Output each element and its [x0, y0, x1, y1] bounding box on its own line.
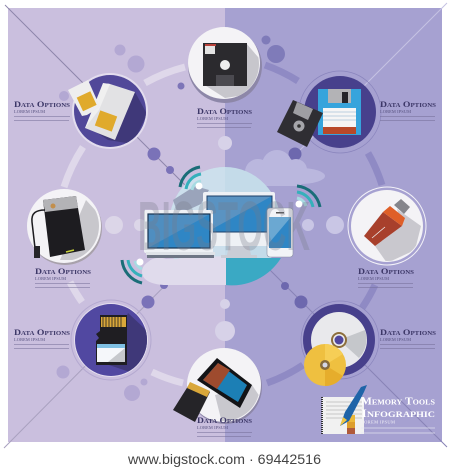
notebook and pen icon — [322, 385, 367, 434]
label: memory card: LOREM IPSUM — [14, 337, 45, 342]
label: USB — [358, 266, 415, 288]
label: hard drive — [35, 266, 92, 288]
label: black diskette: Data Options — [197, 106, 253, 116]
label: tablet: LOREM IPSUM — [197, 425, 228, 430]
label: hard drive: Data Options — [35, 266, 92, 276]
label: blue diskette: LOREM IPSUM — [380, 109, 411, 114]
label: black diskette — [197, 106, 253, 128]
ring arcs — [64, 65, 382, 383]
node: black diskette in white circle — [188, 27, 270, 103]
node: memory card — [71, 300, 158, 380]
wifi arcs — [122, 167, 320, 283]
title block: Memory Tools — [361, 396, 435, 408]
globe — [169, 167, 281, 285]
monitor — [203, 192, 275, 258]
smartphone — [267, 208, 293, 257]
label: USB: LOREM IPSUM — [358, 276, 389, 281]
label: USB: Data Options — [358, 266, 415, 276]
label: SIM: LOREM IPSUM — [14, 109, 45, 114]
label: tablet — [197, 415, 253, 436]
label: CD: LOREM IPSUM — [380, 337, 411, 342]
label: black diskette: LOREM IPSUM — [197, 116, 228, 121]
node: CD discs — [301, 301, 379, 386]
node: USB stick — [348, 187, 426, 265]
label: SIM: Data Options — [14, 99, 71, 109]
label: memory card — [14, 327, 71, 348]
lower left cloud — [142, 256, 226, 285]
label: CD: Data Options — [380, 327, 437, 337]
node: tablet and SD card — [173, 348, 262, 424]
label: blue diskette: Data Options — [380, 99, 437, 109]
label: memory card: Data Options — [14, 327, 71, 337]
stock credit: www.bigstock.com · 69442516 — [127, 452, 321, 467]
title block: Infographic — [361, 406, 435, 420]
laptop — [144, 210, 215, 258]
title block — [361, 396, 435, 433]
label: tablet: Data Options — [197, 415, 253, 425]
clouds — [244, 150, 325, 186]
label: blue diskette — [380, 99, 437, 120]
central hub: globe, clouds and devices — [122, 150, 325, 285]
node: portable hard drive — [27, 189, 106, 265]
node: blue diskette — [277, 71, 381, 153]
node: SIM cards — [68, 73, 148, 149]
label: hard drive: LOREM IPSUM — [35, 276, 66, 281]
label: CD — [380, 327, 437, 348]
title block: LOREM IPSUM — [361, 420, 395, 424]
label: SIM — [14, 99, 71, 120]
decorative bubbles — [56, 36, 344, 401]
